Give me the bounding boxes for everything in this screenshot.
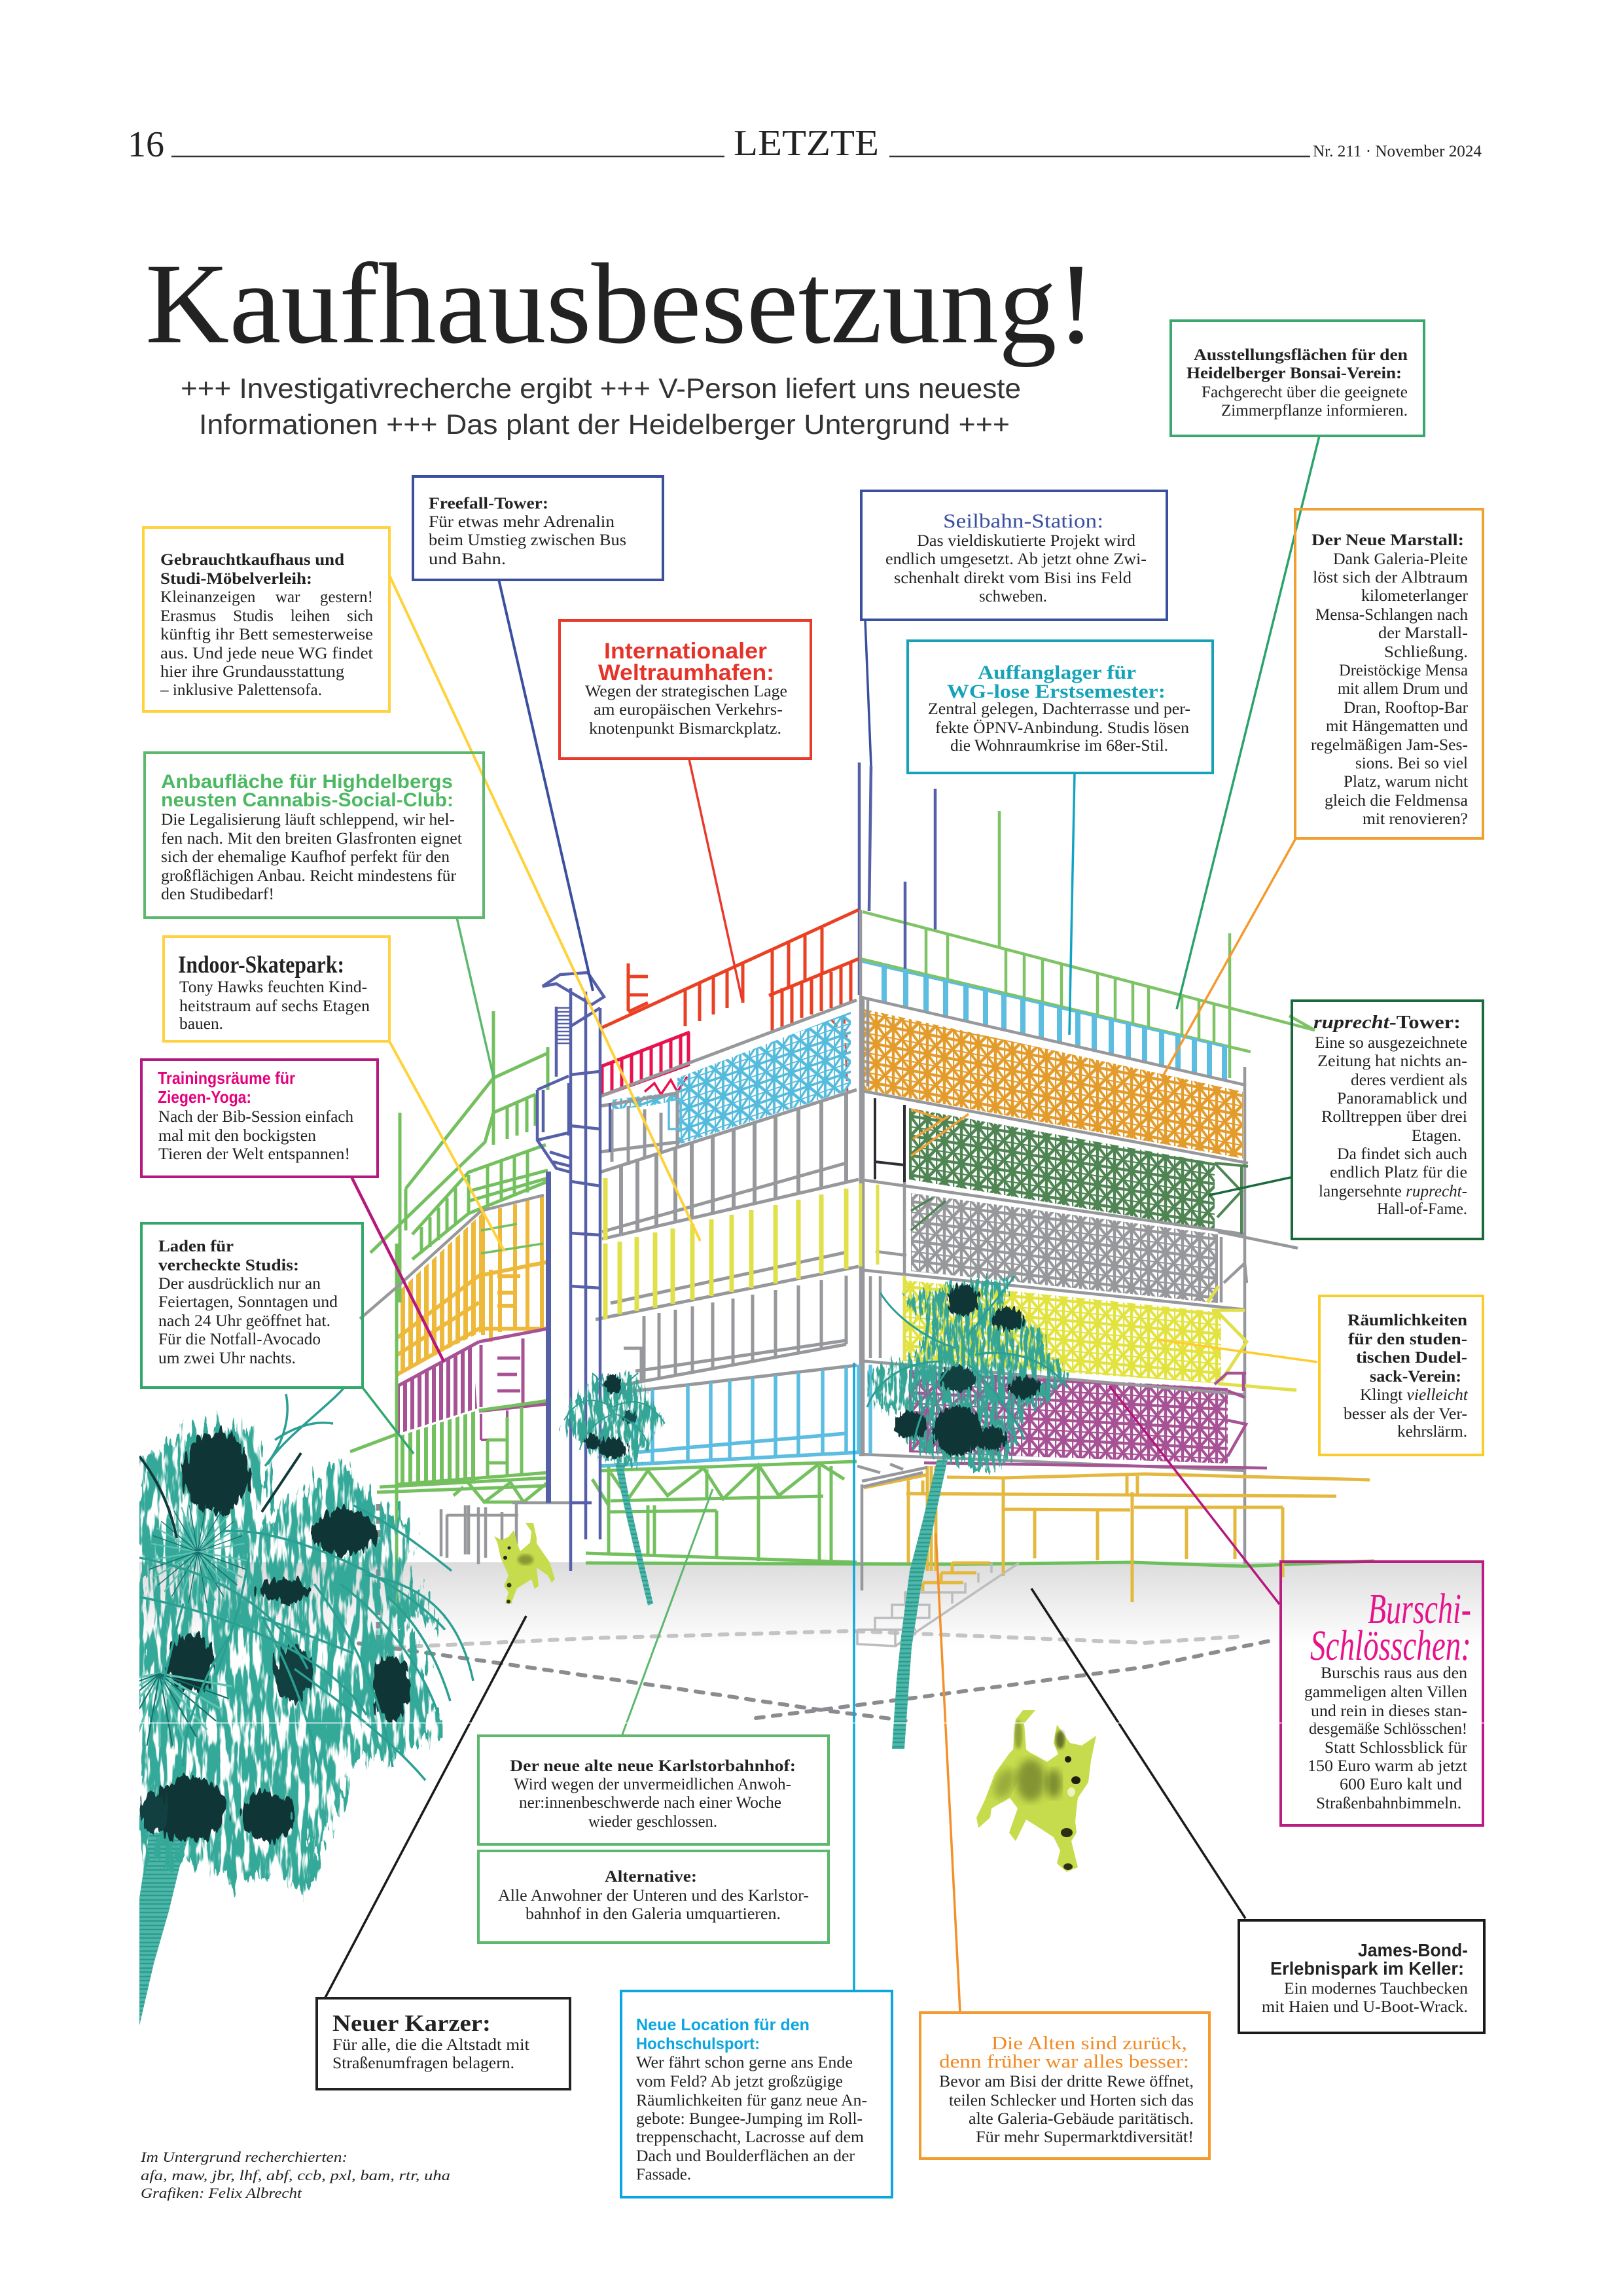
body text: Tieren der Welt entspannen!	[158, 1145, 350, 1163]
heading: Heidelberger Bonsai-Verein:	[1186, 365, 1402, 382]
body text: Dach und Boulderflächen an der	[636, 2147, 855, 2165]
heading: Seilbahn-Station:	[943, 509, 1103, 532]
body text: Wird wegen der unvermeidlichen Anwoh-	[514, 1776, 791, 1793]
body text: deres verdient als	[1351, 1071, 1467, 1089]
body text	[1304, 1664, 1468, 1812]
heading: Internationaler	[604, 639, 767, 664]
dog: large	[976, 1710, 1096, 1872]
body text	[429, 513, 626, 568]
body text: Dreistöckige Mensa	[1339, 662, 1468, 679]
body text: beim Umstieg zwischen Bus	[429, 531, 626, 549]
body text: 150 Euro warm ab jetzt	[1308, 1757, 1467, 1775]
body text	[1315, 1034, 1468, 1218]
building: left wing	[350, 1011, 592, 1614]
body text: langersehnte ruprecht-	[1319, 1183, 1467, 1200]
heading	[1347, 1312, 1467, 1386]
body text: Zentral gelegen, Dachterrasse und per-	[928, 700, 1190, 718]
body text: Feiertagen, Sonntagen und	[158, 1293, 338, 1311]
section name: LETZTE	[734, 123, 879, 164]
panel: Gebrauchtkaufhaus	[143, 528, 389, 711]
body text: Alle Anwohner der Unteren und des Karlstor-	[498, 1887, 809, 1905]
body text: gleich die Feldmensa	[1325, 792, 1468, 810]
heading: Trainingsräume für	[158, 1068, 295, 1088]
body text: Dank Galeria-Pleite	[1333, 550, 1468, 568]
heading	[1270, 1940, 1468, 1979]
body text: – inklusive Palettensofa.	[160, 681, 322, 699]
body text: Tony Hawks feuchten Kind-	[179, 978, 367, 996]
heading: Anbaufläche für Highdelbergs	[161, 771, 453, 793]
body text: Fachgerecht über die geeignete	[1202, 384, 1408, 401]
body text	[636, 2054, 867, 2183]
panel: Freefall-Tower	[413, 476, 663, 580]
body text: Ein modernes Tauchbecken	[1284, 1980, 1469, 1998]
small palm tree	[564, 1373, 665, 1605]
body text: mit Hängematten und	[1326, 717, 1468, 735]
body text: Zeitung hat nichts an-	[1317, 1052, 1467, 1070]
heading: Erlebnispark im Keller:	[1270, 1958, 1464, 1979]
body text: bahnhof in den Galeria umquartieren.	[526, 1905, 781, 1923]
body text	[158, 1275, 338, 1367]
heading: denn früher war alles besser:	[939, 2052, 1189, 2072]
heading	[598, 639, 774, 685]
body text: Wer fährt schon gerne ans Ende	[636, 2054, 853, 2072]
building: gold ground structure	[864, 1466, 1370, 1602]
heading	[161, 771, 454, 811]
body text: Für mehr Supermarktdiversität!	[976, 2128, 1194, 2146]
body text: mal mit den bockigsten	[158, 1127, 317, 1145]
panel: Seilbahn-Station	[861, 491, 1167, 620]
body text	[928, 700, 1190, 755]
panel: Hochschulsport	[621, 1991, 892, 2197]
heading	[939, 2034, 1189, 2072]
body text: und rein in dieses stan-	[1311, 1702, 1467, 1720]
body text: desgemäße Schlösschen!	[1309, 1720, 1467, 1738]
heading: sack-Verein:	[1370, 1368, 1461, 1386]
subtitle	[181, 373, 1021, 440]
heading	[947, 662, 1166, 702]
body text: knotenpunkt Bismarckplatz.	[589, 720, 781, 738]
subtitle: +++ Investigativrecherche ergibt +++ V-Person liefert uns neueste	[181, 373, 1021, 404]
heading: ruprecht -Tower:	[1313, 1012, 1461, 1033]
medium palm tree	[867, 1276, 1067, 1749]
heading: tischen Dudel-	[1356, 1349, 1467, 1367]
body text: Dran, Rooftop-Bar	[1344, 699, 1469, 717]
body text: Räumlichkeiten für ganz neue An-	[636, 2092, 867, 2109]
body text: Platz, warum nicht	[1344, 773, 1468, 791]
body text: Etagen.	[1412, 1127, 1461, 1145]
body text: der Marstall-	[1378, 624, 1468, 642]
body text: gammeligen alten Villen	[1304, 1683, 1467, 1701]
body text: vom Feld? Ab jetzt großzügige	[636, 2073, 843, 2090]
panel: Internationaler Weltraumhafen	[560, 620, 811, 759]
body text: endlich Platz für die	[1330, 1164, 1467, 1181]
dashed floor plan lines	[359, 1504, 1276, 1721]
heading	[160, 551, 344, 588]
body text	[498, 1887, 809, 1923]
body text: Der ausdrücklich nur an	[158, 1275, 321, 1293]
heading: Neuer Karzer:	[332, 2010, 491, 2036]
panel: Laden für vercheckte Studis	[141, 1223, 363, 1388]
body text: mit allem Drum und	[1338, 680, 1468, 698]
heading: James-Bond-	[1358, 1940, 1468, 1960]
body text: Straßenbahnbimmeln.	[1316, 1795, 1461, 1812]
body text: Mensa-Schlangen nach	[1315, 606, 1468, 624]
body text: teilen Schlecker und Horten sich das	[949, 2092, 1194, 2109]
body text: heitstraum auf sechs Etagen	[179, 997, 370, 1015]
body text: Für etwas mehr Adrenalin	[429, 513, 615, 531]
body text: schenhalt direkt vom Bisi ins Feld	[894, 569, 1132, 587]
body text: Burschis raus aus den	[1321, 1664, 1468, 1682]
heading: Weltraumhafen:	[598, 660, 774, 685]
heading: Studi-Möbelverleih:	[160, 570, 312, 588]
page number: 16	[128, 124, 164, 165]
body text: Klingt vielleicht	[1360, 1386, 1469, 1404]
body text: kehrslärm.	[1397, 1423, 1467, 1441]
body text	[585, 683, 787, 738]
heading: Schlösschen:	[1310, 1622, 1471, 1670]
body text: Wegen der strategischen Lage	[585, 683, 787, 700]
building: stair tower	[537, 973, 604, 1571]
body text	[1262, 1980, 1469, 2016]
body text: Schließung.	[1384, 643, 1468, 661]
large palm tree	[88, 1388, 473, 2026]
body text: Eine so ausgezeichnete	[1315, 1034, 1467, 1052]
body text: Bevor am Bisi der dritte Rewe öffnet,	[939, 2073, 1194, 2090]
heading	[158, 1238, 299, 1274]
panel: Karlstorbahnhof	[478, 1736, 829, 1844]
body text: regelmäßigen Jam-Ses-	[1311, 736, 1468, 754]
building: entrance stairs	[857, 1464, 1019, 1646]
body text: aus. Und jede neue WG findet	[160, 645, 373, 662]
body text: Fassade.	[636, 2166, 691, 2183]
body text	[1344, 1386, 1469, 1441]
body text: besser als der Ver-	[1344, 1405, 1467, 1423]
heading: Alternative:	[605, 1868, 697, 1886]
heading	[1186, 346, 1408, 382]
body text: kilometerlanger	[1361, 587, 1469, 605]
panel: Die Alten sind zurück	[920, 2013, 1209, 2159]
body text: Die Legalisierung läuft schleppend, wir hel-	[161, 811, 455, 829]
heading: WG-lose Erstsemester:	[947, 681, 1166, 702]
credits: Grafiken: Felix Albrecht	[141, 2185, 302, 2201]
title: Kaufhausbesetzung!	[145, 240, 1096, 368]
body text: bauen.	[179, 1015, 223, 1033]
heading: Räumlichkeiten	[1347, 1312, 1467, 1329]
body text: Das vieldiskutierte Projekt wird	[917, 532, 1136, 550]
panel: Ziegen-Yoga	[141, 1060, 378, 1177]
panel: Neuer Karzer	[317, 1998, 570, 2089]
body text	[1311, 550, 1469, 828]
body text: Straßenumfragen belagern.	[332, 2054, 514, 2072]
dog: small	[494, 1523, 555, 1604]
body text: Für die Notfall-Avocado	[158, 1331, 321, 1348]
heading: Ziegen-Yoga:	[158, 1087, 251, 1107]
body text: großflächigen Anbau. Reicht mindestens für	[161, 867, 457, 885]
body text	[332, 2036, 529, 2072]
building: right wing beams and corner	[859, 910, 1298, 1564]
body text: sions. Bei so viel	[1355, 755, 1468, 772]
body text: schweben.	[979, 588, 1047, 605]
body text	[939, 2073, 1194, 2146]
heading: Gebrauchtkaufhaus und	[160, 551, 344, 569]
body text: um zwei Uhr nachts.	[158, 1350, 296, 1367]
heading: für den studen-	[1348, 1331, 1467, 1348]
panel: Ausstellungsflächen	[1171, 321, 1424, 436]
heading: Freefall-Tower:	[429, 495, 548, 512]
body text	[179, 978, 370, 1033]
body text: fekte ÖPNV-Anbindung. Studis lösen	[935, 719, 1190, 737]
body text: Erasmus Studis leihen sich	[160, 607, 373, 625]
body text: und Bahn.	[429, 550, 506, 568]
issue label: Nr. 211 · November 2024	[1313, 143, 1482, 160]
heading: Neue Location für den	[636, 2016, 810, 2034]
body text: 600 Euro kalt und	[1340, 1776, 1463, 1793]
heading: Burschi-	[1368, 1585, 1471, 1633]
heading: neusten Cannabis-Social-Club:	[161, 789, 454, 811]
heading: Ausstellungsflächen für den	[1194, 346, 1408, 364]
body text: Kleinanzeigen war gestern!	[160, 588, 373, 606]
body text: nach 24 Uhr geöffnet hat.	[158, 1312, 330, 1330]
body text: hier ihre Grundausstattung	[160, 663, 345, 681]
body text: Da findet sich auch	[1337, 1145, 1468, 1163]
panel: Der Neue Marstall	[1295, 509, 1483, 838]
body text: löst sich der Albtraum	[1313, 569, 1469, 586]
heading	[1310, 1585, 1471, 1670]
heading: vercheckte Studis:	[158, 1257, 299, 1274]
panel: ruprecht-Tower	[1292, 1001, 1483, 1239]
body text: Zimmerpflanze informieren.	[1221, 402, 1408, 420]
panel: Burschi-Schlösschen	[1281, 1562, 1483, 1825]
credits: afa, maw, jbr, lhf, abf, ccb, pxl, bam, rtr, uha	[141, 2167, 450, 2183]
building: roof parapet right	[859, 762, 1315, 1080]
body text: gebote: Bungee-Jumping im Roll-	[636, 2110, 863, 2128]
body text: Panoramablick und	[1337, 1090, 1468, 1107]
panel: Alternative	[478, 1851, 829, 1943]
body text	[885, 532, 1147, 605]
building: left front top floors	[596, 910, 870, 1466]
body text: Hall-of-Fame.	[1377, 1200, 1467, 1218]
body text	[1202, 384, 1408, 420]
panel: James-Bond-Erlebnispark	[1239, 1920, 1484, 2033]
panel: Anbaufläche	[145, 753, 484, 918]
body text: wieder geschlossen.	[588, 1813, 717, 1831]
body text	[514, 1776, 791, 1831]
body text	[161, 811, 462, 903]
credits: Im Untergrund recherchierten:	[140, 2149, 348, 2165]
panel: Dudelsack-Verein	[1319, 1296, 1483, 1455]
body text: Statt Schlossblick für	[1325, 1739, 1468, 1757]
body text: fen nach. Mit den breiten Glasfronten eignet	[161, 830, 462, 848]
building: ground floor green trusses	[586, 1462, 1374, 1566]
heading: Indoor-Skatepark:	[178, 952, 344, 978]
heading: Laden für	[158, 1238, 234, 1255]
body text	[158, 1108, 353, 1163]
heading	[636, 2016, 810, 2053]
body text: künftig ihr Bett semesterweise	[160, 626, 373, 643]
body text: sich der ehemalige Kaufhof perfekt für den	[161, 848, 450, 866]
body text: am europäischen Verkehrs-	[594, 701, 783, 719]
subtitle: Informationen +++ Das plant der Heidelberger Untergrund +++	[199, 409, 1010, 440]
panel: Auffanglager	[908, 641, 1213, 773]
body text: mit Haien und U-Boot-Wrack.	[1262, 1998, 1468, 2016]
building: right wing lattice facades	[865, 1009, 1243, 1463]
credits	[140, 2149, 450, 2201]
heading: Auffanglager für	[978, 662, 1136, 683]
body text: ner:innenbeschwerde nach einer Woche	[519, 1794, 781, 1812]
heading: Hochschulsport:	[636, 2035, 760, 2053]
ground band	[139, 1562, 1484, 1647]
body text: Rolltreppen über drei	[1321, 1108, 1467, 1126]
body text	[160, 588, 373, 699]
page header	[128, 123, 1482, 165]
body text: treppenschacht, Lacrosse auf dem	[636, 2128, 865, 2146]
connector lines	[325, 436, 1319, 2012]
body text: endlich umgesetzt. Ab jetzt ohne Zwi-	[885, 550, 1147, 568]
building illustration	[350, 762, 1374, 1646]
heading: Der neue alte neue Karlstorbahnhof:	[510, 1757, 796, 1775]
panel: Indoor-Skatepark	[164, 937, 389, 1041]
heading: Der Neue Marstall:	[1311, 531, 1464, 549]
heading: Die Alten sind zurück,	[991, 2034, 1187, 2054]
heading	[158, 1068, 295, 1107]
body text: Nach der Bib-Session einfach	[158, 1108, 353, 1126]
body text: den Studibedarf!	[161, 886, 274, 903]
body text: die Wohnraumkrise im 68er-Stil.	[950, 737, 1168, 755]
body text: mit renovieren?	[1363, 810, 1468, 828]
body text: alte Galeria-Gebäude paritätisch.	[969, 2110, 1194, 2128]
body text: Für alle, die die Altstadt mit	[332, 2036, 529, 2054]
